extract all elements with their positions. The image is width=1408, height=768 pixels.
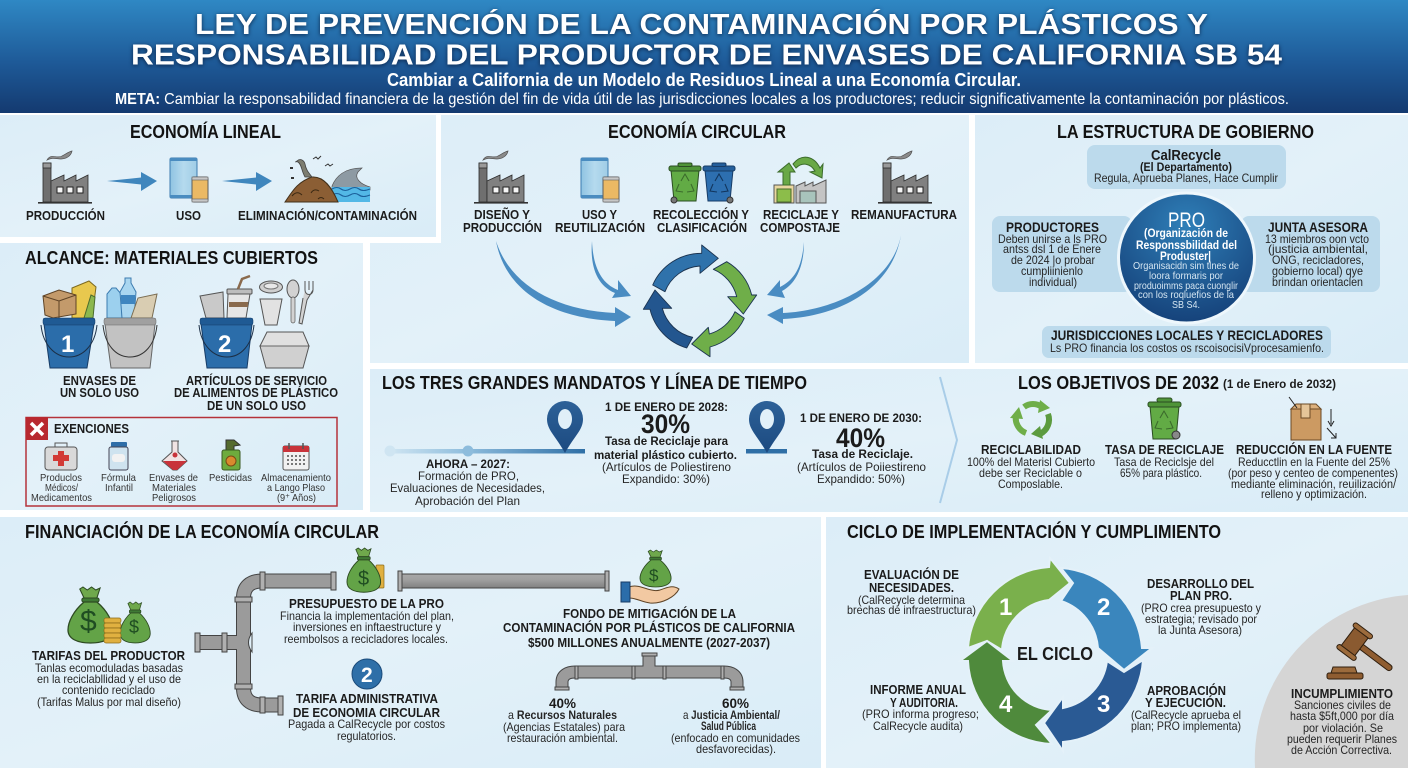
heading: CICLO DE IMPLEMENTACIÓN Y CUMPLIMIENTO — [847, 521, 1221, 542]
heading: LA ESTRUCTURA DE GOBIERNO — [1057, 122, 1314, 142]
icon: pin 2030 — [749, 401, 785, 453]
icon: factory — [474, 151, 528, 204]
text: 2028: 1 DE ENERO DE 2028: — [605, 400, 728, 414]
heading: ECONOMÍA CIRCULAR — [608, 121, 786, 142]
text: reciclabilidad: debe ser Reciclable o — [979, 466, 1082, 480]
text: reciclabilidad: 100% del Materisl Cubierto — [967, 455, 1095, 469]
arrow — [767, 242, 804, 298]
text: aprobación — [1131, 683, 1241, 733]
box: CalRecycle: Regula, Aprueba Planes, Hace Cumplir — [1094, 171, 1278, 185]
label: USO Y — [582, 207, 617, 222]
icon: medical kit — [45, 443, 77, 470]
label: Materiales — [152, 482, 196, 494]
arrow — [496, 241, 631, 327]
label: ENVASES DE — [63, 373, 136, 388]
title: RESPONSABILIDAD DEL PRODUCTOR DE ENVASES DE CALIFORNIA SB 54 — [131, 40, 1282, 72]
pipe: PRO to fund — [398, 571, 609, 591]
icon: source reduction box — [1289, 397, 1336, 440]
label: Fórmula — [101, 472, 136, 484]
text: desarrollo: (PRO crea presupuesto y — [1141, 601, 1261, 615]
text: 40% — [503, 695, 625, 745]
text: tarifas del productor: TARIFAS DEL PRODUCTOR — [32, 648, 186, 663]
label — [261, 472, 331, 504]
text: tarifas del productor: contenido reciclado — [62, 683, 155, 697]
text: incumplimiento: por violación. Se — [1303, 721, 1383, 735]
icon: recycling plant — [774, 157, 826, 203]
icon: factory — [38, 151, 92, 204]
text: 60% — [671, 695, 800, 756]
text: 2030: 1 DE ENERO DE 2030: — [800, 411, 922, 425]
icon: PRO money bag — [347, 548, 384, 592]
icon: money bags — [68, 587, 150, 643]
text: reciclabilidad — [967, 442, 1095, 491]
icon: bucket 2 — [199, 276, 254, 368]
text: 2030: (Artículos de Poiiestireno — [797, 460, 926, 474]
icon: gavel — [1327, 622, 1401, 682]
text: reciclabilidad: Composlable. — [998, 477, 1063, 491]
box: junta asesora: gobierno local) qye — [1272, 264, 1363, 278]
text: evaluación: (CalRecycle determina — [858, 593, 965, 607]
icon: food service ware — [260, 280, 313, 368]
text: 40%: restauración ambiental. — [507, 731, 618, 745]
text: presupuesto: PRESUPUESTO DE LA PRO — [289, 596, 444, 611]
label: ARTÍCULOS DE SERVICIO — [186, 373, 327, 388]
text: reciclabilidad: RECICLABILIDAD — [981, 442, 1081, 457]
icon: bucket 1 — [41, 281, 97, 368]
label: DE UN SOLO USO — [207, 398, 306, 413]
text: incumplimiento: de Acción Correctiva. — [1291, 743, 1392, 757]
box: CalRecycle — [1087, 145, 1286, 189]
text: tarifas del productor: Tanlas ecomoduladas basadas — [35, 661, 183, 675]
text: ahora — [390, 457, 545, 508]
box: jurisdicciones locales — [1042, 326, 1331, 358]
label — [60, 373, 139, 400]
icon: recyclability — [1010, 400, 1050, 439]
text: 2028: Tasa de Reciclaje para — [605, 434, 728, 448]
label: REMANUFACTURA — [851, 207, 958, 222]
box: productores: Deben unirse a ls PRO — [998, 232, 1107, 246]
box: junta asesora — [1241, 216, 1380, 292]
title: LEY DE PREVENCIÓN DE LA CONTAMINACIÓN POR PLÁSTICOS Y — [195, 9, 1208, 41]
circle: PRO: con los roqluefios de la — [1138, 289, 1234, 301]
numbers on the ring: 4 — [999, 691, 1013, 718]
label — [174, 373, 338, 413]
icon: recycling bins — [669, 163, 735, 203]
heading: ALCANCE: MATERIALES CUBIERTOS — [25, 248, 318, 268]
text: 40%: (Agencias Estatales) para — [503, 720, 625, 734]
box: jurisdicciones locales: Ls PRO financia los costos os rscoisocisiVprocesamienfo. — [1050, 341, 1324, 355]
icon: landfill and ocean — [285, 156, 370, 202]
text: tarifas del productor — [32, 648, 186, 709]
label — [653, 207, 749, 235]
box: productores: individual) — [1029, 275, 1077, 289]
text: ahora: Aprobación del Plan — [415, 494, 520, 508]
text: tarifa administrativa: Pagada a CalRecycle por costos — [288, 717, 445, 731]
heading: ECONOMÍA LINEAL — [130, 121, 281, 142]
label: Peligrosos — [152, 492, 196, 504]
text: evaluación — [847, 567, 976, 617]
goal statement: META: Cambiar la responsabilidad financiera de la gestión del fin de vida útil de las jurisdicciones locales a los productores; reducir significativamente la contaminación por plásticos. — [115, 91, 1289, 108]
text: fondo de mitigación: FONDO DE MITIGACIÓN DE LA — [563, 606, 737, 621]
text: ahora: Formación de PRO, — [418, 469, 519, 483]
text: aprobación: APROBACIÓN — [1147, 683, 1226, 698]
icon: hand with money bag — [621, 550, 679, 603]
text: aprobación: (CalRecycle aprueba el — [1131, 708, 1241, 722]
box: junta asesora: ONG, recicladores, — [1272, 253, 1364, 267]
icon: recycling bin — [1148, 398, 1181, 439]
circle: PRO: Organisacidn sim tlnes de — [1133, 260, 1239, 272]
text: 2028: material plástico cubierto. — [594, 448, 737, 462]
box: productores — [992, 216, 1132, 292]
panel: estructura de gobierno — [975, 115, 1408, 363]
text: 2030: Tasa de Reciclaje. — [812, 447, 913, 461]
text: tarifa administrativa: DE ECONOMIA CIRCULAR — [293, 705, 441, 720]
icon: bucket with bottles — [103, 278, 157, 368]
text: tarifa administrativa: TARIFA ADMINISTRATIVA — [296, 691, 439, 706]
text: tasa de reciclaje: TASA DE RECICLAJE — [1105, 442, 1224, 457]
text: presupuesto — [280, 596, 454, 646]
icon: pin 2028 — [547, 401, 583, 453]
label — [101, 472, 136, 494]
text: desarrollo: PLAN PRO. — [1170, 588, 1232, 603]
icon: money bags: $ — [129, 617, 139, 637]
numbers on the ring — [999, 594, 1110, 718]
text: 40%: 40% — [549, 695, 577, 711]
text: informe: INFORME ANUAL — [870, 682, 966, 697]
label: PRODUCCIÓN — [463, 220, 542, 235]
text: 2028: 30% — [641, 409, 690, 439]
label — [555, 207, 645, 235]
text: reducción en la fuente: REDUCCIÓN EN LA FUENTE — [1236, 442, 1392, 457]
text: presupuesto: Financia la implementación del plan, — [280, 609, 454, 623]
icon: hazardous flask — [162, 441, 187, 470]
header banner — [0, 0, 1408, 113]
text: incumplimiento: INCUMPLIMIENTO — [1291, 686, 1393, 701]
segment 1 — [968, 558, 1070, 650]
text: tarifa administrativa — [288, 691, 445, 743]
numbers on the ring: 3 — [1097, 691, 1110, 718]
label: RECICLAJE Y — [763, 207, 839, 222]
icon: packaging — [170, 158, 208, 202]
box: junta asesora: JUNTA ASESORA — [1268, 219, 1368, 235]
text: evaluación: brechas de infraestructura) — [847, 603, 976, 617]
box: productores: PRODUCTORES — [1006, 219, 1099, 235]
pipes: productor to PRO and tarifa — [195, 572, 336, 715]
text: aprobación: Y EJECUCIÓN. — [1145, 695, 1226, 710]
text: fondo de mitigación: CONTAMINACIÓN POR PLÁSTICOS DE CALIFORNIA — [503, 620, 796, 635]
icon: hand with money bag: $ — [649, 566, 659, 585]
text: fondo de mitigación: $500 MILLONES ANUALMENTE (2027-2037) — [528, 635, 770, 650]
panel: economía circular — [370, 115, 969, 363]
box: jurisdicciones locales: JURISDICCIONES LOCALES Y RECICLADORES — [1051, 327, 1323, 343]
text: tasa de reciclaje: Tasa de Reciclsje del — [1114, 455, 1214, 469]
text: aprobación: plan; PRO implementa) — [1131, 719, 1241, 733]
label — [463, 207, 542, 235]
text: 2030 — [797, 411, 926, 486]
arrow — [222, 172, 272, 191]
label: Medicamentos — [31, 492, 92, 504]
numbers on the ring: 1 — [999, 594, 1012, 621]
circle: PRO: SB S4. — [1172, 299, 1200, 311]
text: desarrollo: estrategia; revisado por — [1145, 612, 1257, 626]
circle: PRO — [1118, 193, 1254, 323]
text: incumplimiento: hasta $5ft,000 por día — [1290, 709, 1394, 723]
label — [31, 472, 92, 504]
text: evaluación: EVALUACIÓN DE — [864, 567, 959, 582]
text: 2028 — [594, 400, 737, 486]
label: DE ALIMENTOS DE PLÁSTICO — [174, 385, 338, 400]
text: 60%: desfavorecidas). — [696, 742, 776, 756]
label: a Lango Plaso — [267, 482, 325, 494]
text: presupuesto: reembolsos a recicladores locales. — [284, 632, 448, 646]
box: junta asesora: 13 miembros oon vcto — [1265, 232, 1369, 246]
text: tarifa administrativa: regulatorios. — [337, 729, 396, 743]
text: tasa de reciclaje — [1105, 442, 1224, 480]
ring center label: EL CICLO — [1017, 644, 1093, 664]
text: reducción en la fuente: relleno y optimización. — [1261, 487, 1367, 501]
segment 4 — [960, 641, 1052, 744]
heading: exenciones: EXENCIONES — [54, 421, 129, 436]
circle: PRO: (Organización de — [1144, 226, 1228, 240]
chart: cycle ring — [960, 558, 1152, 751]
panel: economía lineal — [0, 115, 436, 237]
box: productores: de 2024 |o probar — [1011, 253, 1095, 267]
heading: objetivos: (1 de Enero de 2032) — [1223, 377, 1336, 391]
label: (9⁺ Años) — [277, 492, 316, 504]
badge: 2 — [352, 659, 382, 689]
icon: packaging — [581, 158, 619, 202]
label: DISEÑO Y — [474, 207, 530, 222]
text: tarifas del productor: en la reciclabllidad y el uso de — [37, 672, 181, 686]
circle: PRO: produoimms paca cuonglir — [1134, 280, 1238, 292]
segment 3 — [1044, 660, 1143, 751]
title — [131, 9, 1282, 72]
text: ahora: Evaluaciones de Necesidades, — [390, 481, 545, 495]
icon: bucket 2: 2 — [218, 331, 231, 358]
arrow — [767, 235, 901, 324]
label: PRODUCCIÓN — [26, 208, 105, 223]
gray corner: incumplimiento background — [1255, 595, 1408, 768]
box: junta asesora: brindan orientaclen — [1272, 275, 1363, 289]
icon: X mark — [26, 417, 48, 440]
label: USO — [176, 208, 201, 223]
box: junta asesora: (justicia ambiental, — [1268, 242, 1368, 256]
text: informe — [862, 682, 979, 733]
circle: PRO: Responssbilidad del — [1136, 238, 1237, 252]
text: 2030: 40% — [836, 423, 885, 453]
heading: objetivos — [1018, 373, 1336, 393]
icon: formula jar — [109, 442, 128, 470]
heading: FINANCIACIÓN DE LA ECONOMÍA CIRCULAR — [25, 521, 379, 542]
heading: mandatos: LOS TRES GRANDES MANDATOS Y LÍNEA DE TIEMPO — [382, 372, 807, 393]
text: tarifas del productor: (Tarifas Malus por mal diseño) — [37, 695, 181, 709]
icon: money bags: $ — [80, 605, 97, 638]
box: exenciones — [26, 417, 337, 506]
text: desarrollo: DESARROLLO DEL — [1147, 576, 1254, 591]
label — [760, 207, 840, 235]
panel: financiación — [0, 517, 821, 768]
label: Pesticidas — [209, 472, 252, 484]
numbers on the ring: 2 — [1097, 594, 1110, 621]
label — [149, 472, 198, 504]
text: 60%: a Justicia Ambiental/ — [683, 708, 781, 722]
label: COMPOSTAJE — [760, 220, 840, 235]
label: Médicos/ — [45, 482, 78, 494]
text: presupuesto: inversiones en inftaestructure y — [293, 620, 441, 634]
heading: objetivos: LOS OBJETIVOS DE 2032 — [1018, 373, 1219, 393]
text: incumplimiento — [1287, 686, 1397, 757]
text: informe: Y AUDITORIA. — [890, 695, 958, 710]
pipe: split of fund — [555, 653, 744, 690]
panel: alcance materiales cubiertos — [0, 243, 363, 510]
label: REUTILIZACIÓN — [555, 220, 645, 235]
timeline — [384, 401, 787, 456]
text: tasa de reciclaje: 65% para plástico. — [1120, 466, 1202, 480]
text: 2028: (Artículos de Poliestireno — [602, 460, 731, 474]
subtitle: Cambiar a California de un Modelo de Residuos Lineal a una Economía Circular. — [387, 69, 1021, 90]
icon: bucket 1: 1 — [61, 331, 74, 358]
label: Envases de — [149, 472, 198, 484]
text: reducción en la fuente — [1228, 442, 1398, 501]
text: 2028: Expandido: 30%) — [622, 472, 710, 486]
text: 60%: 60% — [722, 695, 750, 711]
arrow — [592, 241, 631, 298]
chevron divider — [940, 377, 957, 503]
text: desarrollo — [1141, 576, 1261, 637]
label: Infantil — [105, 482, 133, 494]
box: CalRecycle: (El Departamento) — [1140, 160, 1232, 174]
icon: calendar — [283, 443, 309, 470]
arrow — [107, 172, 157, 191]
icon: factory — [878, 151, 932, 204]
badge: 2: 2 — [361, 664, 373, 687]
text: informe: (PRO informa progreso; — [862, 707, 979, 721]
label: Almacenamiento — [261, 472, 331, 484]
circle: PRO: Produster| — [1160, 249, 1211, 263]
text: 60%: (enfocado en comunidades — [671, 731, 800, 745]
box: productores: cumpliinienlo — [1021, 264, 1083, 278]
box: productores: antss dsl 1 de Enere — [1003, 242, 1101, 256]
text: ahora: AHORA – 2027: — [426, 457, 510, 471]
label: UN SOLO USO — [60, 385, 139, 400]
label: Produclos — [40, 472, 82, 484]
text: 40%: a Recursos Naturales — [508, 708, 617, 722]
icon: pesticide spray — [222, 440, 240, 470]
label: ELIMINACIÓN/CONTAMINACIÓN — [238, 208, 417, 223]
text: 60%: Salud Pública — [701, 719, 756, 733]
text: evaluación: NECESIDADES. — [869, 580, 954, 595]
text: reducción en la fuente: Reducctlin en la Fuente del 25% — [1238, 455, 1390, 469]
panel: ciclo de implementación — [826, 517, 1408, 768]
segment 2 — [1061, 568, 1152, 670]
circle: PRO: PRO — [1168, 209, 1205, 232]
text: fondo de mitigación — [503, 606, 796, 650]
text: informe: CalRecycle audita) — [873, 719, 963, 733]
text: incumplimiento: Sanciones civiles de — [1294, 698, 1391, 712]
cycle arrows — [643, 245, 757, 357]
icon: PRO money bag: $ — [358, 568, 369, 590]
text: 2030: Expandido: 50%) — [817, 472, 905, 486]
circle: PRO: loora formaris por — [1149, 270, 1223, 282]
label: CLASIFICACIÓN — [657, 220, 747, 235]
label: RECOLECCIÓN Y — [653, 207, 749, 222]
panel: mandatos y objetivos — [370, 369, 1408, 512]
text: desarrollo: la Junta Asesora) — [1158, 623, 1242, 637]
box: CalRecycle: CalRecycle — [1151, 147, 1221, 164]
